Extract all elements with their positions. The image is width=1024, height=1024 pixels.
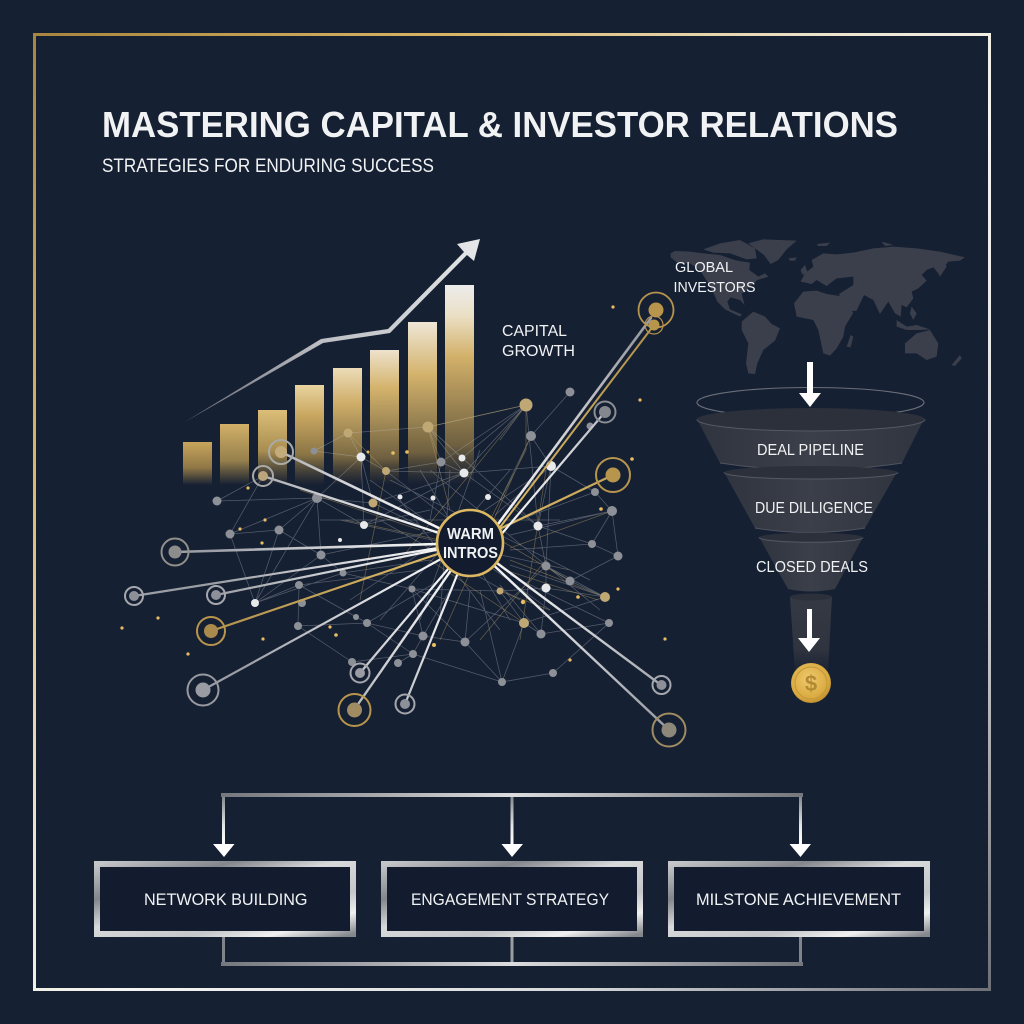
spokes from hub to investors bbox=[134, 318, 669, 730]
label: capital growth: GROWTH bbox=[502, 343, 575, 360]
label: global investors: GLOBAL bbox=[675, 259, 733, 276]
icon: gold coin: $ bbox=[805, 671, 817, 696]
arrow: funnel to coin bbox=[798, 609, 820, 652]
label: global investors bbox=[674, 259, 756, 296]
icon: gold coin bbox=[791, 663, 831, 703]
connector: top bracket with arrows bbox=[213, 793, 811, 857]
hub: warm intros: WARM bbox=[447, 526, 494, 543]
bar chart: capital growth bbox=[183, 285, 474, 485]
funnel: deal pipeline: DUE DILLIGENCE bbox=[755, 500, 873, 517]
label: capital growth bbox=[502, 323, 575, 360]
hub: warm intros: INTROS bbox=[443, 545, 498, 562]
connector: bottom bracket bbox=[221, 937, 803, 966]
box: engagement strategy bbox=[384, 864, 640, 934]
network mesh lines bbox=[217, 392, 618, 682]
funnel: deal pipeline: CLOSED DEALS bbox=[756, 559, 868, 576]
network mesh nodes bbox=[120, 305, 667, 686]
box: milestone achievement: MILSTONE ACHIEVEMENT bbox=[696, 890, 901, 909]
label: capital growth: CAPITAL bbox=[502, 323, 567, 340]
box: engagement strategy: ENGAGEMENT STRATEGY bbox=[411, 890, 609, 909]
funnel: deal pipeline: DEAL PIPELINE bbox=[757, 442, 864, 459]
investor nodes bbox=[125, 292, 686, 746]
box: network building: NETWORK BUILDING bbox=[144, 890, 308, 909]
growth arrow bbox=[183, 239, 480, 423]
title: MASTERING CAPITAL & INVESTOR RELATIONS bbox=[102, 104, 898, 145]
hub: warm intros bbox=[437, 510, 503, 576]
label: global investors: INVESTORS bbox=[674, 279, 756, 296]
funnel: deal pipeline bbox=[697, 388, 925, 672]
box: milestone achievement bbox=[671, 864, 927, 934]
world map bbox=[671, 239, 965, 374]
arrow: map into funnel bbox=[799, 362, 821, 407]
subtitle: STRATEGIES FOR ENDURING SUCCESS bbox=[102, 156, 434, 177]
box: network building bbox=[97, 864, 353, 934]
